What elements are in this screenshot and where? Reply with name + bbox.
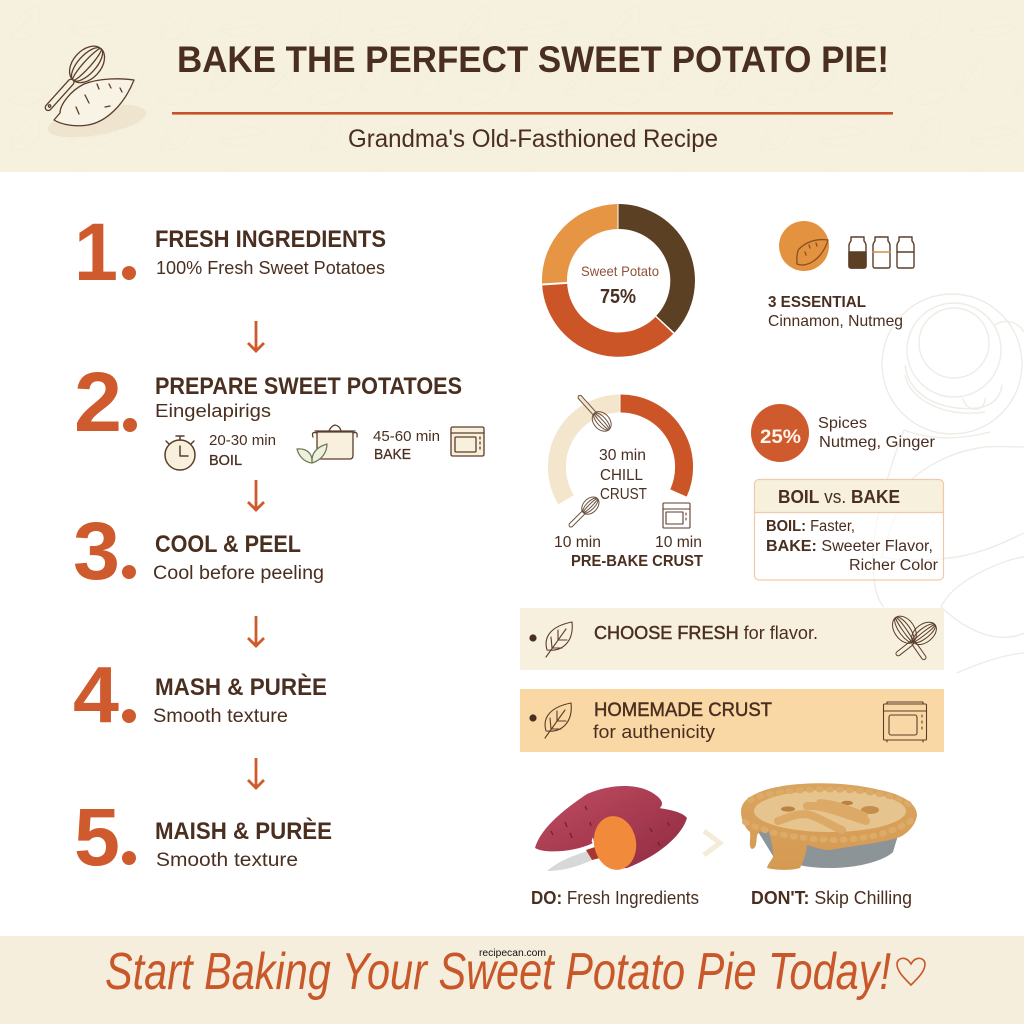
spices badge: Nutmeg, Ginger bbox=[819, 434, 936, 451]
icon: sweet potato circle bbox=[779, 221, 829, 271]
comparison box: boil vs bake bbox=[754, 480, 944, 580]
icon: heart bbox=[897, 958, 925, 985]
step 3: 3 bbox=[73, 506, 120, 597]
step 4: MASH & PURÈE bbox=[155, 673, 327, 701]
essential spices text bbox=[768, 294, 903, 330]
icon: leaf bbox=[546, 622, 572, 657]
background watermark: pie and sweet potatoes bbox=[873, 294, 1024, 673]
icon: leaf bbox=[545, 703, 571, 738]
step 3: Cool before peeling bbox=[153, 562, 324, 584]
spices badge bbox=[751, 404, 936, 462]
donut chart: 75% bbox=[600, 286, 636, 308]
step 2: PREPARE SWEET POTATOES bbox=[155, 373, 462, 400]
footer band bbox=[0, 936, 1024, 1024]
step 3: COOL & PEEL bbox=[155, 531, 301, 558]
arrow 2 bbox=[248, 480, 264, 510]
subtitle: Grandma's Old-Fasthioned Recipe bbox=[348, 125, 718, 153]
tip bar: choose fresh: CHOOSE FRESH for flavor. bbox=[594, 623, 818, 643]
gauge chart: CRUST bbox=[600, 486, 647, 503]
tip bar: homemade crust: HOMEMADE CRUST bbox=[594, 700, 772, 721]
comparison box: boil vs bake: BAKE: Sweeter Flavor, bbox=[766, 538, 933, 555]
step 5 bbox=[74, 792, 332, 883]
icon: oven bbox=[451, 427, 484, 456]
icon: crossed whisks bbox=[888, 612, 941, 665]
boil time: 20-30 min bbox=[209, 432, 276, 449]
icon: spice jars bbox=[849, 237, 914, 268]
step 2: BOIL bbox=[209, 452, 242, 469]
essential spices text: Cinnamon, Nutmeg bbox=[768, 313, 903, 330]
step 2: 2 bbox=[74, 355, 122, 449]
step 2: Eingelapirigs bbox=[155, 400, 271, 421]
bake time: 45-60 min bbox=[373, 428, 440, 445]
box heading: BOIL vs. BAKE bbox=[778, 487, 900, 507]
tip bar: choose fresh bbox=[520, 608, 944, 670]
arrow 1 bbox=[248, 321, 264, 351]
gauge chart: 10 min bbox=[655, 534, 702, 551]
gauge chart: 10 min bbox=[554, 534, 601, 551]
icon: whisk and sweet potato bbox=[36, 39, 149, 143]
step 3 bbox=[73, 506, 324, 597]
icon: oven small bbox=[663, 503, 690, 528]
spices badge: 25% bbox=[760, 427, 801, 448]
step 2: BAKE bbox=[374, 446, 411, 463]
step 1 bbox=[74, 207, 386, 298]
donut chart bbox=[542, 204, 695, 357]
box body: BOIL: Faster, bbox=[766, 518, 855, 535]
step 5: Smooth texture bbox=[156, 849, 298, 871]
icon: whisk top bbox=[573, 390, 615, 435]
gauge chart: CHILL bbox=[600, 467, 643, 484]
spices badge: Spices bbox=[818, 415, 867, 432]
step 5: MAISH & PURÈE bbox=[155, 817, 332, 845]
title: BAKE THE PERFECT SWEET POTATO PIE! bbox=[177, 38, 889, 80]
step 5: 5 bbox=[74, 792, 120, 883]
step 1: 100% Fresh Sweet Potatoes bbox=[156, 257, 385, 278]
gauge labels: 30 min bbox=[599, 447, 646, 464]
step 4 bbox=[73, 650, 327, 739]
illustration: sweet potatoes with knife bbox=[535, 786, 687, 873]
arrow 4 bbox=[248, 758, 264, 788]
dont label: DON'T: Skip Chilling bbox=[751, 888, 912, 908]
icon: stopwatch bbox=[165, 436, 195, 470]
icon: whisk lower bbox=[565, 494, 602, 531]
tip bar: homemade crust bbox=[520, 689, 944, 752]
donut label: Sweet Potato bbox=[581, 263, 659, 279]
arrow: chevron bbox=[704, 831, 720, 855]
icon: oven bbox=[884, 702, 926, 742]
gauge chart bbox=[554, 390, 703, 570]
header band bbox=[0, 0, 1024, 172]
watermark url: recipecan.com bbox=[479, 948, 546, 959]
step 1: 1 bbox=[74, 207, 118, 298]
illustration: pie bbox=[741, 783, 917, 870]
essential spices text: 3 ESSENTIAL bbox=[768, 294, 866, 311]
comparison box: boil vs bake: Richer Color bbox=[849, 557, 938, 574]
gauge chart: PRE-BAKE CRUST bbox=[571, 553, 703, 570]
do label: DO: Fresh Ingredients bbox=[531, 888, 699, 908]
step 4: 4 bbox=[73, 650, 120, 739]
step 2 bbox=[74, 355, 484, 470]
icon: pot with leaves bbox=[297, 425, 357, 463]
arrow 3 bbox=[248, 616, 264, 646]
step 4: Smooth texture bbox=[153, 705, 288, 727]
tip bar: homemade crust: for authenicity bbox=[593, 722, 715, 742]
step 1: FRESH INGREDIENTS bbox=[155, 226, 386, 253]
